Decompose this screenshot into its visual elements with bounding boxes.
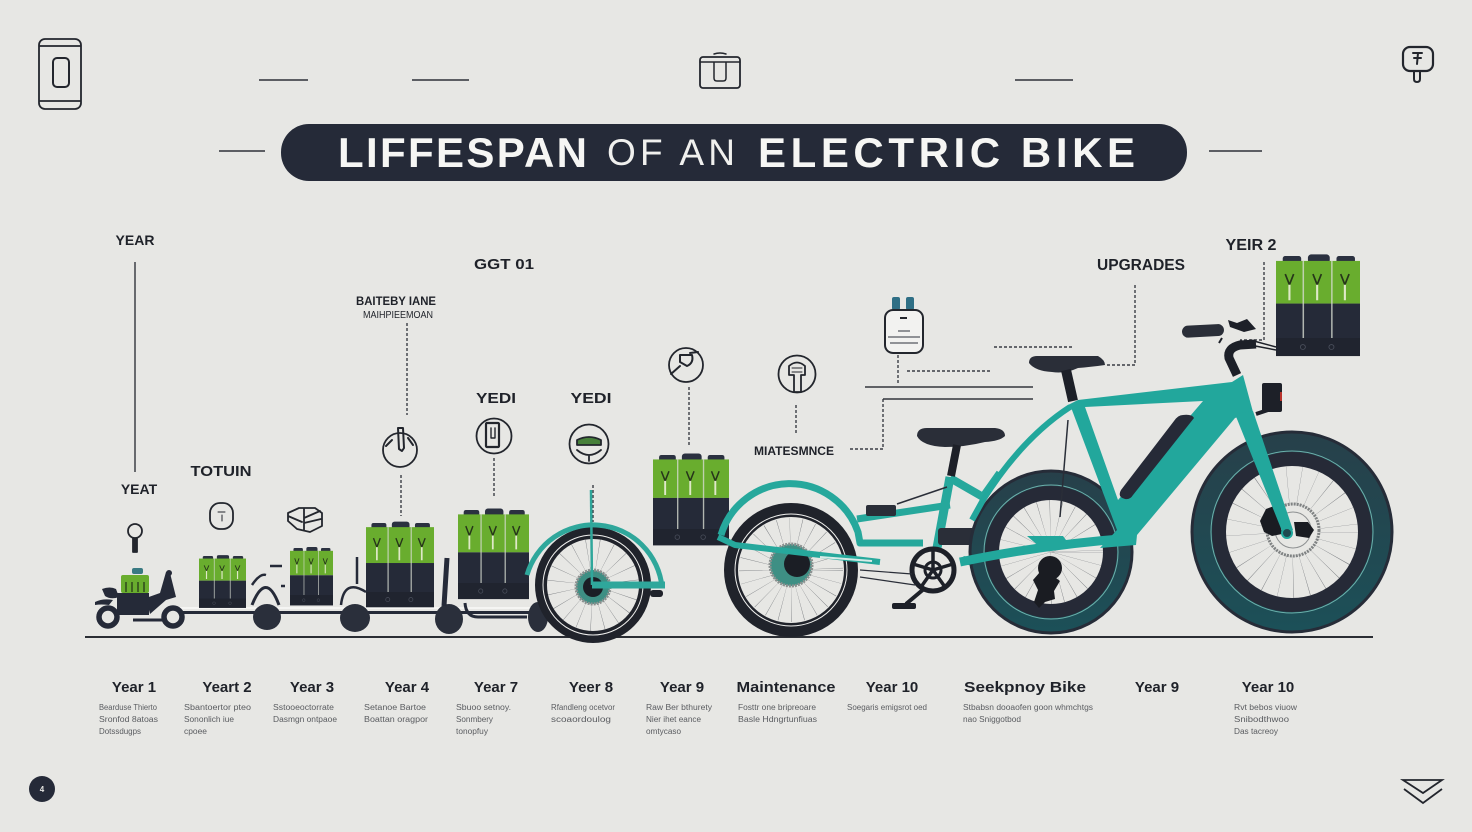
timeline captions: Sonmbery: [456, 715, 493, 724]
timeline captions: cpoee: [184, 727, 208, 736]
timeline captions: Dasmgn ontpaoe: [273, 715, 338, 724]
floating labels: YEAR: [116, 232, 154, 248]
icon: hand in circle: [383, 428, 417, 467]
battery stack: year 10 on handlebar: [1276, 254, 1360, 356]
icon: badge: [210, 503, 233, 529]
timeline captions: Soegaris emigsrot oed: [847, 703, 927, 712]
icon: package: [288, 508, 322, 532]
large bike saddle and seat post: [1029, 356, 1105, 517]
floating labels: UPGRADES: [1097, 257, 1185, 274]
timeline captions: Year 3: [290, 679, 334, 696]
timeline captions: nao Sniggotbod: [963, 715, 1021, 724]
timeline captions: Seekpnoy Bike: [964, 679, 1086, 696]
timeline captions: Rvt bebos viuow: [1234, 703, 1297, 712]
large bike teal frame: [960, 375, 1293, 562]
timeline captions: Year 9: [660, 679, 704, 696]
scooter with battery: [95, 568, 182, 626]
timeline captions: Dotssdugps: [99, 727, 141, 736]
timeline captions: Snibodthwoo: [1234, 715, 1290, 724]
floating labels: BAITEBY IANE: [356, 294, 436, 308]
title banner: ELECTRIC BIKE: [758, 129, 1135, 176]
large bike rear wheel: [970, 471, 1132, 633]
icon: green device in circle: [570, 424, 608, 464]
timeline captions: Stbabsn dooaofen goon whmchtgs: [963, 703, 1093, 712]
timeline captions: Maintenance: [736, 679, 836, 696]
battery stack: year 4: [366, 522, 434, 607]
timeline captions: Rfandleng ocetvor: [551, 703, 615, 712]
large bike handlebar: [1182, 319, 1276, 375]
icon: bag top centre: [700, 53, 740, 88]
title banner: [281, 124, 1187, 181]
page number badge: 4: [40, 785, 45, 794]
middle bike saddle and crank: [860, 428, 1005, 609]
floating labels: YEAT: [121, 481, 158, 497]
timeline captions: Year 10: [866, 679, 918, 696]
timeline captions: Das tacreoy: [1234, 727, 1278, 736]
battery stack: year 3: [290, 547, 333, 605]
timeline captions: tonopfuy: [456, 727, 488, 736]
ground line: [85, 636, 1373, 638]
icon: sign top right: [1403, 47, 1433, 82]
timeline captions: Sronfod 8atoas: [99, 715, 158, 724]
timeline captions: scoaordoulog: [551, 715, 611, 724]
battery stack: year 9: [653, 454, 729, 545]
timeline captions: Boattan oragpor: [364, 715, 428, 724]
timeline captions: [99, 679, 1297, 736]
top rule lines: [219, 80, 1262, 151]
timeline captions: Nier ihet eance: [646, 715, 702, 724]
icon: phone top left: [39, 39, 81, 109]
leader lines: [135, 262, 1264, 522]
timeline captions: Year 7: [474, 679, 518, 696]
timeline captions: Setanoe Bartoe: [364, 703, 427, 712]
front light: [1256, 383, 1282, 414]
icon: chevron bottom right: [1403, 780, 1442, 803]
timeline captions: Yeer 8: [569, 679, 613, 696]
icon: bulb: [128, 524, 142, 552]
timeline captions: Raw Ber bthurety: [646, 703, 712, 712]
timeline captions: Basle Hdngrtunfiuas: [738, 715, 817, 724]
timeline captions: Yeart 2: [202, 679, 252, 696]
floating labels: YEDI: [476, 390, 516, 407]
floating labels: YEIR 2: [1226, 237, 1277, 254]
page number badge: [29, 776, 55, 802]
icon: phone in circle: [476, 418, 512, 454]
floating labels: MAIHPIEEMOAN: [363, 310, 433, 321]
timeline captions: Year 10: [1242, 679, 1294, 696]
timeline captions: Year 4: [385, 679, 430, 696]
icon: battery pouch: [885, 297, 923, 353]
floating labels: [116, 232, 1277, 497]
timeline captions: Bearduse Thierto: [99, 703, 158, 712]
large bike front wheel: [1192, 432, 1392, 632]
timeline captions: Fosttr one bripreoare: [738, 703, 817, 712]
floating labels: MIATESMNCE: [754, 444, 834, 458]
title banner: OF AN: [607, 132, 735, 173]
battery stack: year 7: [458, 509, 529, 599]
timeline captions: Sbantoertor pteo: [184, 703, 252, 712]
timeline captions: Year 1: [112, 679, 156, 696]
title banner: LIFFESPAN: [338, 129, 587, 176]
small bike track: [180, 557, 548, 634]
timeline captions: Year 9: [1135, 679, 1179, 696]
middle bike rear wheel: [731, 510, 851, 630]
front small wheel: [527, 490, 665, 637]
battery stack: year 2: [199, 555, 246, 608]
middle bike frame: [718, 473, 1010, 568]
icon: maintenance bulb: [778, 356, 816, 392]
timeline captions: Sbuoo setnoy.: [456, 703, 511, 712]
icon: wrench in circle: [669, 348, 703, 382]
floating labels: GGT 01: [474, 256, 534, 273]
floating labels: YEDI: [570, 390, 612, 407]
timeline captions: Sstooeoctorrate: [273, 703, 335, 712]
timeline captions: Sononlich iue: [184, 715, 235, 724]
timeline captions: omtycaso: [646, 727, 682, 736]
floating labels: TOTUIN: [190, 463, 252, 480]
